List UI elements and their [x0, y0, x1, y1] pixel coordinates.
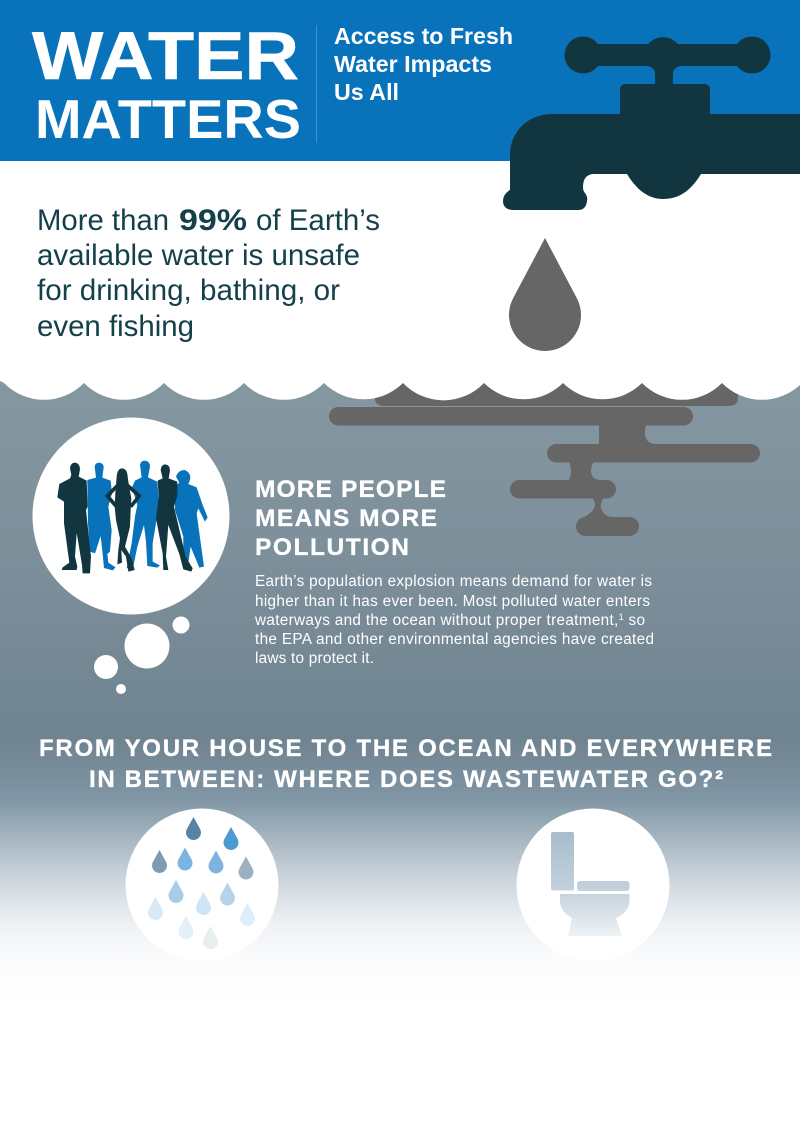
subtitle: Access to Fresh	[334, 23, 513, 49]
statistic text	[37, 204, 380, 343]
icon: falling drop	[509, 238, 581, 351]
statistic text: even fishing	[37, 310, 194, 343]
polluted water background	[0, 375, 800, 1015]
subtitle: Water Impacts	[334, 51, 492, 77]
header divider	[316, 25, 317, 143]
heading: more people	[255, 476, 446, 561]
statistic text: of Earth’s	[256, 204, 380, 237]
heading: more people: MEANS MORE	[255, 505, 437, 532]
toilet	[551, 832, 630, 936]
statistic text: More than	[37, 204, 169, 237]
paragraph: population: 1	[619, 612, 624, 622]
paragraph: population: higher than it has ever been. Most polluted water enters	[255, 593, 650, 610]
title	[32, 18, 301, 150]
statistic text: for drinking, bathing, or	[37, 274, 340, 307]
icon: people silhouettes	[57, 461, 208, 573]
heading: wastewater	[39, 735, 772, 793]
icon: rain circle	[126, 808, 278, 962]
icon: faucet	[503, 36, 800, 210]
oil slick	[329, 380, 760, 536]
statistic text: 99%	[179, 204, 247, 237]
paragraph: population: Earth’s population explosion means demand for water is	[255, 573, 652, 590]
paragraph: population: laws to protect it.	[255, 650, 374, 667]
subtitle: Us All	[334, 79, 399, 105]
heading: more people: MORE PEOPLE	[255, 476, 446, 503]
subtitle	[334, 23, 513, 105]
rain drops	[148, 817, 255, 949]
paragraph: population: the EPA and other environmental agencies have created	[255, 631, 654, 648]
paragraph: population	[254, 573, 654, 667]
paragraph: population: so	[624, 612, 645, 629]
heading: wastewater: IN BETWEEN: WHERE DOES WASTEWATER GO?²	[89, 766, 723, 793]
header band	[0, 0, 800, 161]
paragraph: population: waterways and the ocean without proper treatment,	[255, 612, 618, 629]
heading: more people: POLLUTION	[255, 534, 409, 561]
icon: toilet circle	[516, 808, 670, 962]
title: WATER	[32, 18, 299, 94]
heading: wastewater: FROM YOUR HOUSE TO THE OCEAN AND EVERYWHERE	[39, 735, 772, 762]
wave edge	[0, 372, 800, 400]
blue figures	[87, 461, 208, 570]
dark figures	[57, 463, 193, 573]
thought bubble	[32, 418, 230, 694]
statistic text: available water is unsafe	[37, 239, 360, 272]
title: MATTERS	[35, 88, 301, 150]
